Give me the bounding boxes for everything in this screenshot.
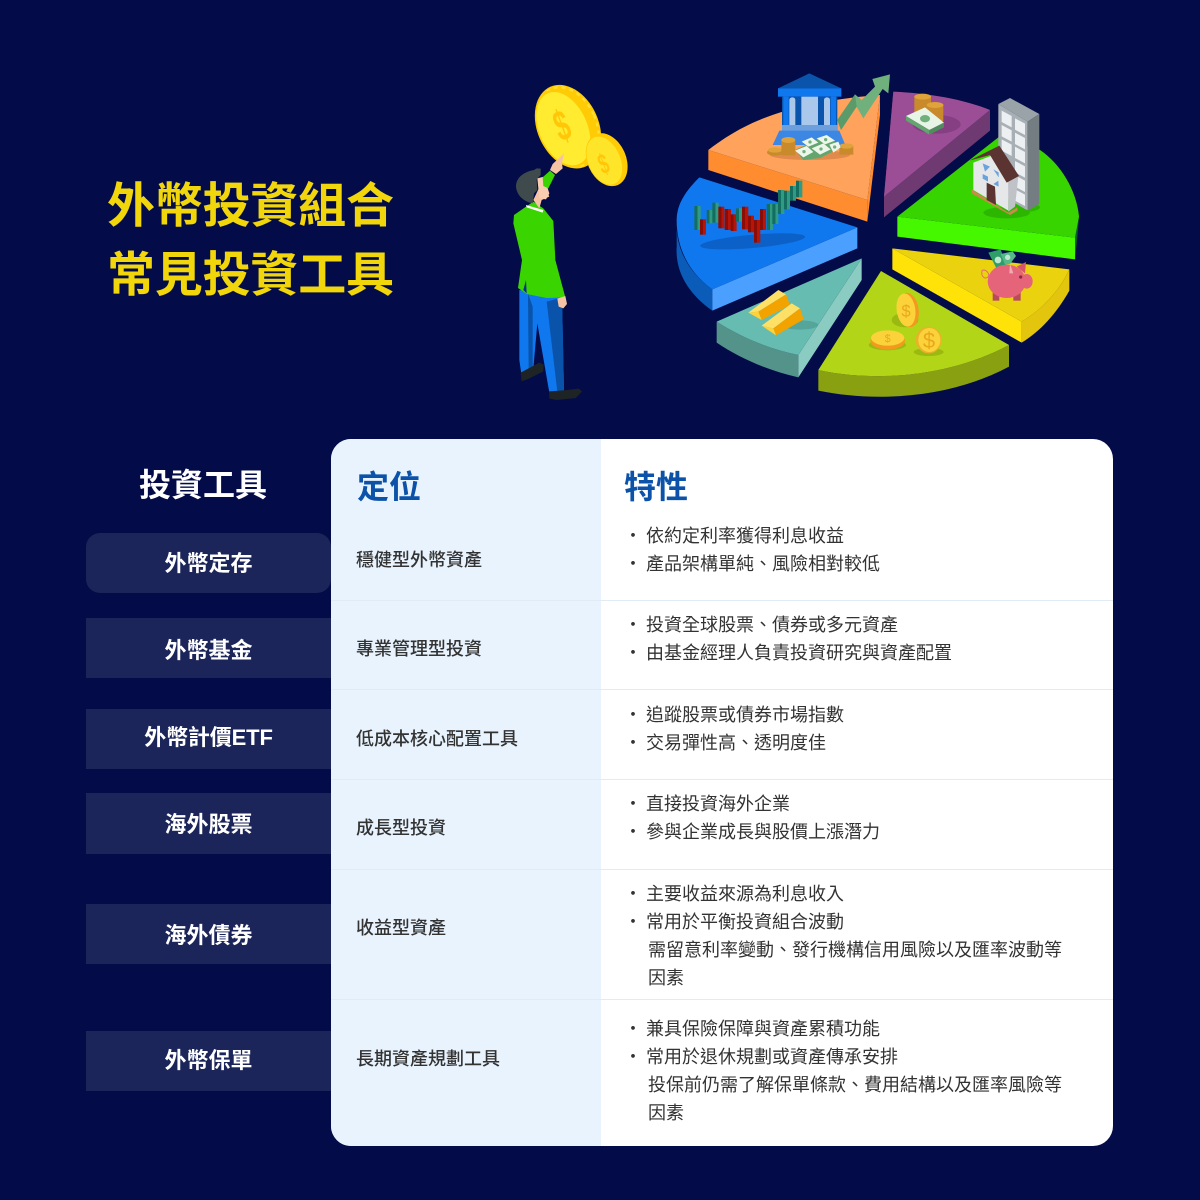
row label: 海外債券: 海外債券 <box>164 923 252 948</box>
icon: small gold coin <box>578 127 636 193</box>
icon: coins on lime slice <box>869 291 944 356</box>
characteristics: row 5: ・ <box>624 912 642 932</box>
row label: 外幣計價ETF <box>86 709 331 769</box>
characteristics: row 2: 由基金經理人負責投資研究與資產配置 <box>646 643 952 663</box>
row label: 外幣保單: 外幣保單 <box>164 1048 252 1073</box>
characteristics: row 1: 產品架構單純、風險相對較低 <box>646 554 880 574</box>
positioning text: row 5: 收益型資產 <box>356 918 446 938</box>
characteristics: row 5: 因素 <box>648 968 684 988</box>
pie slice: green <box>897 137 1079 259</box>
illustration: 3D investment pie chart <box>676 73 1079 397</box>
icon: coins on lime slice: $ <box>901 302 911 321</box>
pie slice: purple <box>884 92 990 217</box>
positioning text: row 2: 專業管理型投資 <box>356 639 482 659</box>
characteristics: row 5: 需留意利率變動、發行機構信用風險以及匯率波動等 <box>648 940 1062 960</box>
row label: 外幣基金: 外幣基金 <box>164 638 252 663</box>
characteristics: row 3: ・ <box>624 705 642 725</box>
positioning text: row 6: 長期資產規劃工具 <box>356 1049 500 1069</box>
row label: 外幣計價ETF: 外幣計價ETF <box>144 725 273 750</box>
characteristics: row 5: 常用於平衡投資組合波動 <box>646 912 844 932</box>
characteristics: row 4: 參與企業成長與股價上漲潛力 <box>646 822 880 842</box>
icon: cash and coins on bank slice <box>767 135 853 160</box>
characteristics: row 6: 兼具保險保障與資產累積功能 <box>646 1019 880 1039</box>
positioning text: row 3: 低成本核心配置工具 <box>356 729 518 749</box>
icon: large gold coin <box>522 74 614 179</box>
characteristics: row 6: ・ <box>624 1019 642 1039</box>
characteristics: row 1 <box>624 526 880 574</box>
characteristics: row 1: 依約定利率獲得利息收益 <box>646 526 844 546</box>
characteristics: row 6: 因素 <box>648 1103 684 1123</box>
icon: coins on lime slice: $ <box>885 333 891 345</box>
characteristics: row 3 <box>624 705 844 753</box>
pie slice: orange <box>708 95 880 222</box>
characteristics: row 2: ・ <box>624 643 642 663</box>
characteristics: row 4 <box>624 794 880 842</box>
row label: 外幣定存 <box>86 533 331 593</box>
row label: 外幣基金 <box>86 618 331 678</box>
characteristics: row 3: ・ <box>624 733 642 753</box>
characteristics: row 2: 投資全球股票、債券或多元資產 <box>646 615 898 635</box>
characteristics: row 5: 主要收益來源為利息收入 <box>646 884 844 904</box>
heading: positioning: 定位 <box>357 469 421 505</box>
characteristics: row 1: ・ <box>624 554 642 574</box>
pie slice: lime <box>818 271 1009 397</box>
characteristics: row 4: ・ <box>624 822 642 842</box>
characteristics: row 3: 追蹤股票或債券市場指數 <box>646 705 844 725</box>
characteristics: row 4: 直接投資海外企業 <box>646 794 790 814</box>
row label: 海外股票: 海外股票 <box>164 812 252 837</box>
characteristics: row 2: ・ <box>624 615 642 635</box>
pie slice: blue <box>677 177 857 311</box>
row label: 外幣定存: 外幣定存 <box>164 551 252 576</box>
column background: positioning <box>331 439 601 1146</box>
icon: large gold coin: $ <box>547 100 577 151</box>
heading: characteristics: 特性 <box>624 469 688 505</box>
row label: 海外股票 <box>86 793 331 854</box>
title <box>107 180 394 302</box>
icon: piggy bank <box>982 249 1033 301</box>
panel: comparison table <box>331 439 1113 1146</box>
positioning text: row 1: 穩健型外幣資產 <box>356 550 482 570</box>
row label: 外幣保單 <box>86 1031 331 1091</box>
icon: small gold coin: $ <box>594 147 613 180</box>
person <box>513 153 582 400</box>
icon: bank building <box>773 73 845 145</box>
icon: house <box>969 146 1030 218</box>
characteristics: row 5: ・ <box>624 884 642 904</box>
positioning text: row 4: 成長型投資 <box>356 818 446 838</box>
pie slice: teal <box>717 258 862 377</box>
characteristics: row 1: ・ <box>624 526 642 546</box>
icon: office tower <box>998 98 1040 212</box>
icon: gold bars <box>748 290 818 335</box>
title: 常見投資工具 <box>107 249 394 302</box>
characteristics: row 2 <box>624 615 952 663</box>
icon: growth arrow <box>837 74 890 130</box>
heading: investment tools: 投資工具 <box>139 467 267 503</box>
illustration: person reaching for coins <box>513 84 628 400</box>
title: 外幣投資組合 <box>107 180 394 233</box>
characteristics: row 5 <box>624 884 1062 988</box>
pie slice: yellow <box>892 248 1069 343</box>
characteristics: row 4: ・ <box>624 794 642 814</box>
characteristics: row 3: 交易彈性高、透明度佳 <box>646 733 826 753</box>
characteristics: row 6: 常用於退休規劃或資產傳承安排 <box>646 1047 898 1067</box>
characteristics: row 6: ・ <box>624 1047 642 1067</box>
icon: candlestick chart <box>694 181 802 243</box>
characteristics: row 6 <box>624 1019 1062 1123</box>
characteristics: row 6: 投保前仍需了解保單條款、費用結構以及匯率風險等 <box>648 1075 1062 1095</box>
icon: coins on lime slice: $ <box>923 328 935 353</box>
icon: cash and coins on purple slice <box>906 94 961 135</box>
row label: 海外債券 <box>86 904 331 964</box>
